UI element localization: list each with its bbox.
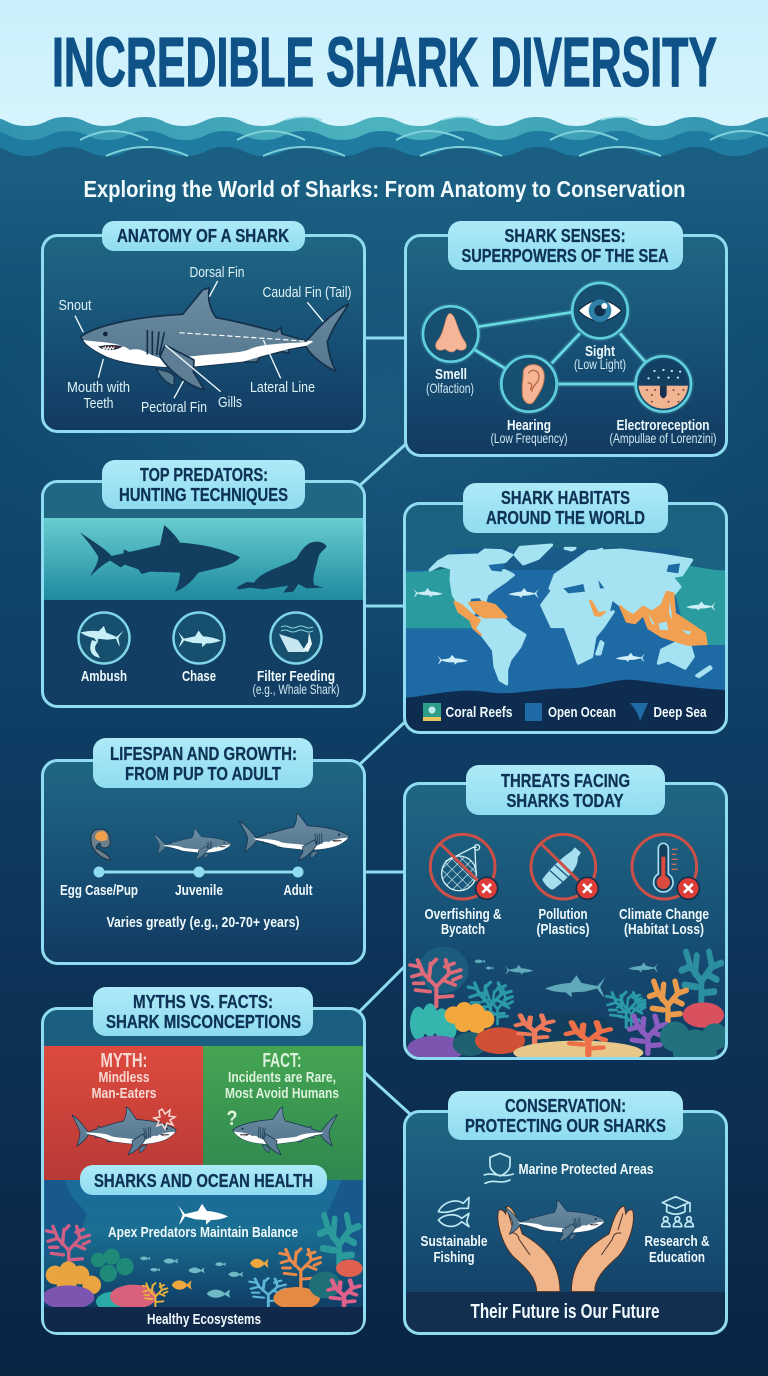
threat labels: Bycatch [441,921,485,938]
subtitle: Exploring the World of Sharks: From Anatomy to Conservation [84,176,686,202]
seal silhouette [237,542,327,593]
anatomy labels: Mouth with [67,379,130,396]
anatomy labels: Dorsal Fin [190,264,244,281]
sharks on map [413,588,716,665]
anatomy labels [58,264,352,416]
growth timeline [94,866,304,878]
sense labels: Smell [435,366,467,383]
world map [404,545,725,740]
legend [423,703,707,721]
technique: filter feeding: (e.g., Whale Shark) [252,681,340,697]
icon: egg case [91,829,110,860]
threat icons [430,834,699,899]
panel: conservation [404,1091,726,1334]
footer bar [406,1292,725,1332]
technique: chase: Chase [182,668,216,685]
conservation labels: Sustainable [420,1233,488,1250]
icon: graduation cap and people [662,1197,693,1227]
badge: senses heading: SHARK SENSES: [504,226,626,246]
badge: ocean health: SHARKS AND OCEAN HEALTH [94,1171,313,1191]
shark in hands [505,1200,605,1242]
hands holding shark [498,1206,633,1292]
threat labels: Pollution [538,906,588,923]
fact text: Most Avoid Humans [225,1085,339,1102]
legend: Deep Sea [654,704,707,721]
technique: ambush: Ambush [81,668,127,685]
panel: shark senses [406,221,726,456]
sense labels: (Ampullae of Lorenzini) [610,430,716,446]
apex predator: Apex Predators Maintain Balance [108,1224,298,1241]
panel: shark habitats [404,483,726,740]
badge: threats heading: THREATS FACING [501,771,630,791]
coral reef zones [454,592,707,645]
threat labels: (Habitat Loss) [624,921,704,938]
badge: predators heading: HUNTING TECHNIQUES [119,485,288,505]
shark diagram [75,281,348,398]
badge: predators heading [102,460,305,509]
myth text: Man-Eaters [92,1085,156,1102]
shark silhouette [80,525,240,592]
fact text: Incidents are Rare, [228,1069,336,1086]
timeline labels: Juvenile [175,882,223,899]
legend: Coral Reefs [446,704,512,721]
anatomy labels: Gills [218,394,242,411]
fact text: FACT: [262,1050,302,1072]
badge: senses heading: SUPERPOWERS OF THE SEA [462,246,668,266]
ocean health scene [42,1180,363,1312]
hunting scene [44,483,363,600]
badge: habitats heading: AROUND THE WORLD [486,508,645,528]
timeline labels: Egg Case/Pup [60,882,138,899]
angry shark [72,1107,176,1155]
badge: conservation heading [448,1091,683,1140]
myth text: MYTH: [100,1050,148,1072]
waves [0,117,768,172]
badge: myths heading [93,987,313,1036]
fact block [203,1046,363,1180]
badge: myths heading: SHARK MISCONCEPTIONS [106,1012,301,1032]
curious shark [226,1107,337,1155]
panel: anatomy of a shark [42,221,364,432]
coral reef scene [407,947,728,1065]
badge: senses heading [448,221,683,270]
icon: eye [569,280,631,341]
fact text [225,1050,339,1102]
sense labels: Hearing [507,417,551,434]
anatomy labels: Snout [58,297,92,314]
technique: filter feeding: Filter Feeding [257,668,335,685]
sense labels: (Olfaction) [426,380,474,396]
anatomy labels: Lateral Line [250,379,315,396]
reef shark and fish [474,959,658,997]
reef fish [140,1256,243,1298]
apex predator [108,1204,298,1241]
myth text: Mindless [98,1069,150,1086]
myth text [92,1050,156,1102]
technique: chase [174,612,224,685]
healthy ecosystems bar: Healthy Ecosystems [147,1311,261,1328]
threat labels: Climate Change [619,906,709,923]
badge: conservation heading: PROTECTING OUR SHARKS [465,1116,666,1136]
conservation labels: Marine Protected Areas [518,1161,654,1178]
badge: ocean health [80,1165,327,1195]
icon: electroreception [633,353,694,415]
continents [430,545,711,684]
adult shark [239,814,349,860]
sense labels: (Low Light) [574,356,626,372]
juvenile shark [153,829,231,860]
healthy ecosystems bar [44,1307,363,1332]
anatomy labels: Teeth [84,395,114,412]
sense labels [426,343,716,446]
threat labels: (Plastics) [536,921,590,938]
icon: plastic bottle [531,834,598,899]
icon: shield [484,1153,513,1183]
icon: nose [420,303,481,365]
anatomy labels: Pectoral Fin [141,399,207,416]
icon: ear [498,353,560,415]
panel: myths vs facts [42,987,364,1334]
badge: lifespan heading: LIFESPAN AND GROWTH: [110,744,297,764]
timeline labels: Adult [284,882,312,899]
myth block [44,1046,203,1180]
icons: marine protected areas, fishing, research [438,1153,693,1227]
badge: habitats heading [463,483,668,533]
threat labels [424,906,709,938]
anatomy labels: Caudal Fin (Tail) [262,284,352,301]
conservation labels: Fishing [434,1249,474,1266]
icon: fish [438,1197,469,1227]
timeline labels: Varies greatly (e.g., 20-70+ years) [106,914,300,931]
connectors between panels [358,338,410,1114]
badge: lifespan heading: FROM PUP TO ADULT [125,764,281,784]
curious shark: ? [226,1107,238,1130]
icon: fishing net [430,834,498,899]
conservation labels: Research & [644,1233,710,1250]
sense labels: Sight [585,343,615,360]
footer bar: Their Future is Our Future [470,1301,660,1323]
sense labels: Electroreception [616,417,710,434]
panel: threats [404,765,728,1065]
technique: filter feeding [252,612,340,697]
sense labels: (Low Frequency) [490,430,568,446]
badge: myths heading: MYTHS VS. FACTS: [133,992,273,1012]
panel: lifespan and growth [42,738,364,964]
sense network [420,280,694,415]
threat labels: Overfishing & [424,906,502,923]
legend: Open Ocean [548,704,616,721]
badge: threats heading: SHARKS TODAY [506,791,624,811]
panel: top predators [42,460,364,706]
technique: ambush [78,612,130,685]
icon: thermometer [632,834,699,899]
conservation labels: Education [649,1249,705,1266]
badge: threats heading [466,765,665,815]
badge: anatomy heading: ANATOMY OF A SHARK [117,226,289,246]
badge: habitats heading: SHARK HABITATS [501,488,630,508]
conservation labels [420,1161,710,1266]
timeline labels [60,882,312,931]
badge: conservation heading: CONSERVATION: [505,1096,626,1116]
badge: lifespan heading [93,738,313,788]
badge: predators heading: TOP PREDATORS: [140,465,268,485]
badge: anatomy heading [102,221,305,251]
